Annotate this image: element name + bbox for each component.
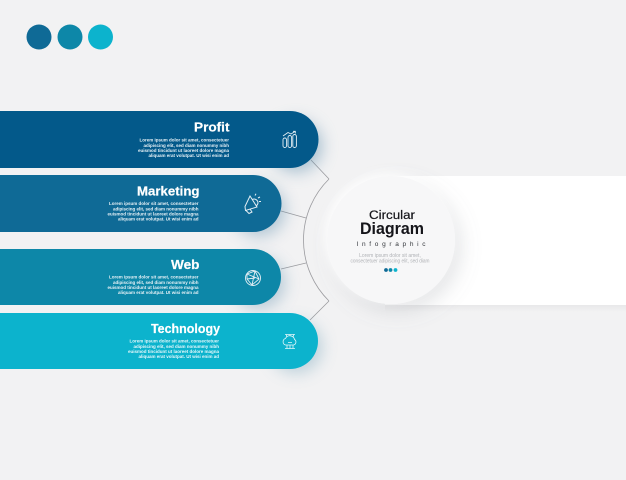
text block: profit: aliquam erat volutpat. Ut wisi enim ad	[148, 153, 229, 158]
text block: marketing	[107, 201, 199, 222]
text block: center description: consectetuer adipiscing elit, sed diam	[350, 258, 430, 264]
heading: diagram: Diagram	[360, 220, 424, 238]
small dots	[384, 268, 397, 272]
text block: web: adipiscing elit, sed diam nonummy nibh	[113, 280, 199, 285]
icon: globe network	[246, 270, 260, 286]
text block: technology	[128, 338, 219, 359]
icon: cloud network	[283, 334, 296, 348]
text block: technology: Lorem ipsum dolor sit amet, consectetuer	[129, 338, 219, 344]
text block: technology: adipiscing elit, sed diam nonummy nibh	[133, 344, 219, 349]
text block: profit	[138, 138, 229, 158]
panel: web	[0, 249, 285, 309]
panel: technology	[0, 313, 322, 373]
subheading: infographic: Infographic	[356, 241, 426, 248]
text block: profit: adipiscing elit, sed diam nonummy nibh	[143, 143, 229, 148]
panel: profit	[0, 111, 322, 172]
icon: megaphone	[245, 194, 261, 214]
palette dots	[26, 24, 113, 50]
text block: web	[107, 274, 199, 295]
text block: marketing: aliquam erat volutpat. Ut wisi enim ad	[118, 217, 199, 222]
central circle	[327, 176, 455, 304]
text block: technology: aliquam erat volutpat. Ut wisi enim ad	[138, 354, 219, 359]
icon: bar chart	[283, 131, 296, 148]
heading: circular: Circular	[369, 210, 415, 222]
text block: web: Lorem ipsum dolor sit amet, consectetuer	[109, 274, 199, 280]
text block: marketing: adipiscing elit, sed diam nonummy nibh	[113, 206, 199, 211]
heading: marketing: Marketing	[137, 184, 200, 198]
text block: profit: Lorem ipsum dolor sit amet, consectetuer	[139, 138, 229, 142]
connector arc and lines	[281, 160, 329, 320]
text block: center description: Lorem ipsum dolor sit amet,	[359, 253, 421, 259]
heading: profit: Profit	[194, 120, 230, 134]
text block: technology: euismod tincidunt ut laoreet dolore magna	[128, 349, 219, 354]
heading: web: Web	[171, 257, 200, 272]
heading: technology: Technology	[151, 321, 221, 336]
text block: web: aliquam erat volutpat. Ut wisi enim ad	[118, 290, 199, 295]
text block: web: euismod tincidunt ut laoreet dolore magna	[107, 285, 199, 290]
panel: marketing	[0, 175, 285, 236]
text block: center description	[350, 253, 430, 264]
text block: marketing: euismod tincidunt ut laoreet dolore magna	[107, 212, 199, 216]
text block: marketing: Lorem ipsum dolor sit amet, consectetuer	[109, 201, 199, 206]
white band behind circle	[385, 176, 626, 312]
text block: profit: euismod tincidunt ut laoreet dolore magna	[138, 148, 229, 153]
